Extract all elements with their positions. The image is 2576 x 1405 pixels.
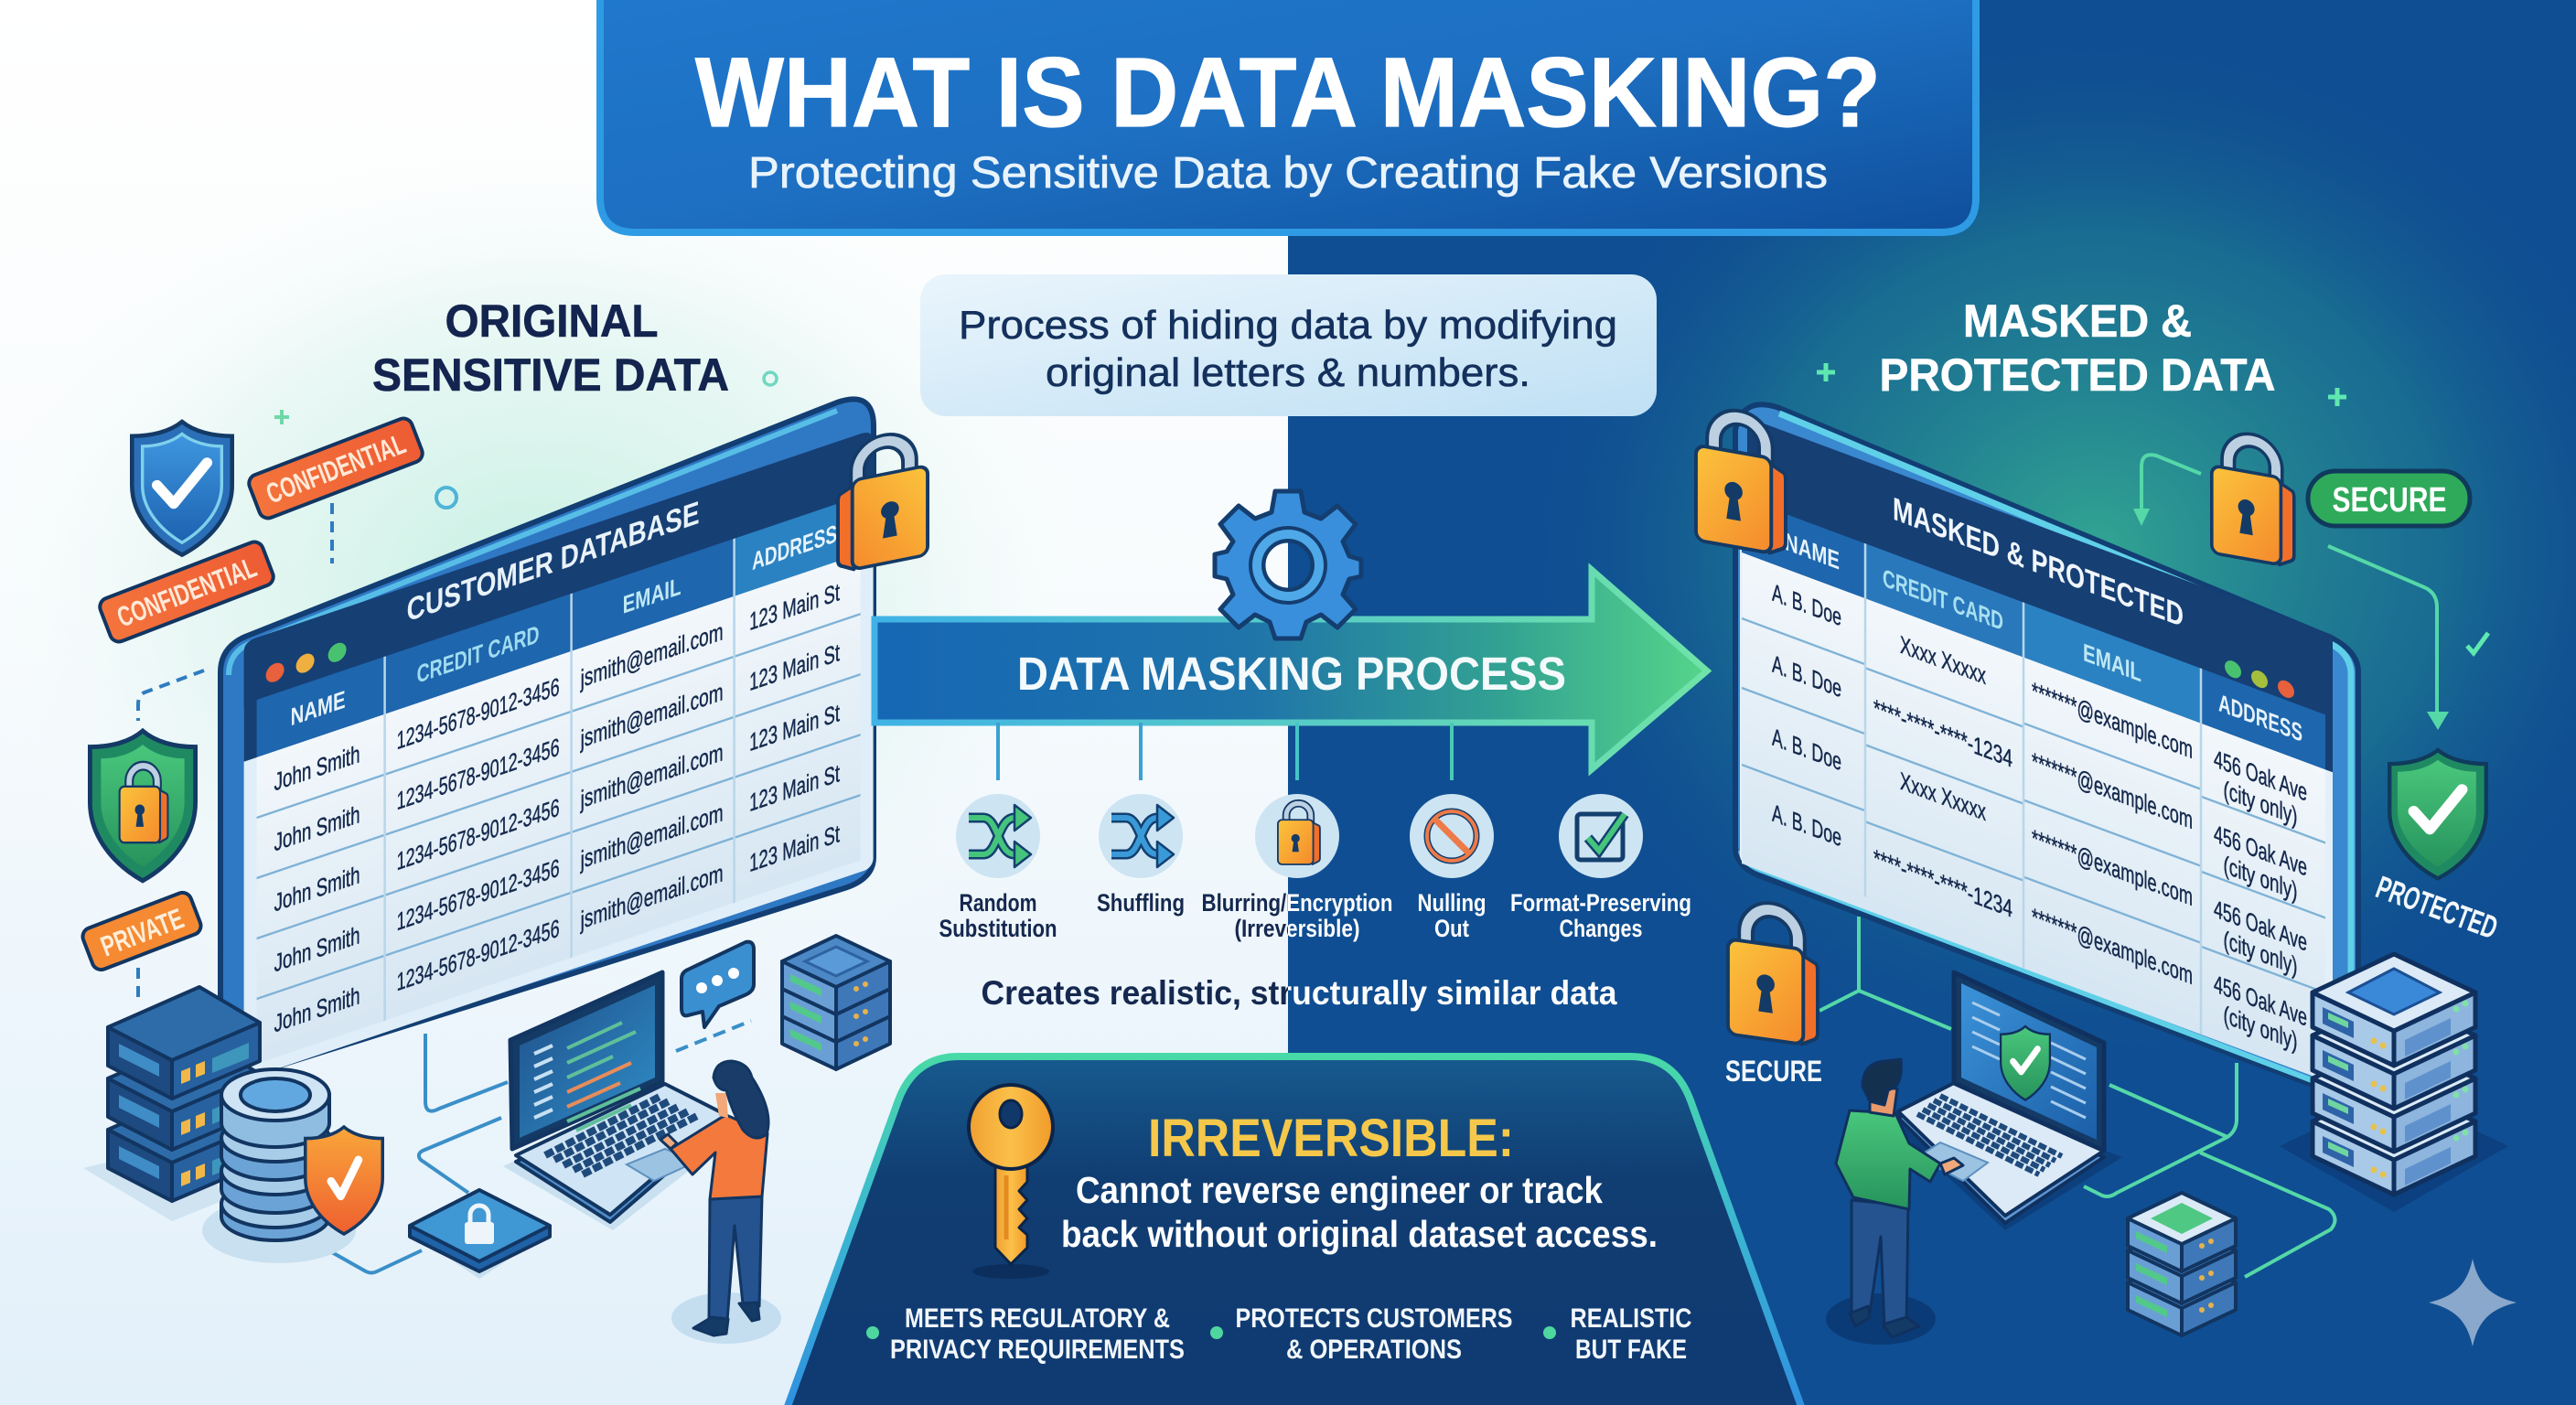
table rows: 123 Main St (749, 638, 840, 696)
background split left light (0, 0, 1288, 1405)
table rows: *******@example.com (2032, 747, 2193, 834)
step: blurring and encryption: Blurring/Encryption (1202, 889, 1392, 917)
data connectors right (1819, 455, 2449, 1277)
table rows (257, 496, 861, 1064)
panel: irreversible (785, 1056, 1804, 1405)
benefit: customers (1210, 1303, 1513, 1365)
badge: confidential lower (97, 540, 276, 644)
icon: speech bubble (676, 942, 754, 1051)
benefit: regulatory: PRIVACY REQUIREMENTS (890, 1335, 1185, 1365)
step: shuffling: Shuffling (1097, 889, 1185, 917)
heading: original sensitive data (372, 295, 729, 401)
table rows: jsmith@email.com (580, 799, 724, 874)
sparkle decorations left (274, 372, 777, 508)
table rows: ****-****-****-1234 (1873, 843, 2012, 923)
table rows: (city only) (2223, 776, 2298, 831)
table rows: 123 Main St (749, 698, 840, 756)
callout: definition (920, 274, 1657, 416)
table rows: 456 Oak Ave (2214, 970, 2307, 1032)
process stems (998, 723, 1452, 780)
callout: definition: original letters & numbers. (1046, 350, 1530, 395)
table rows: 123 Main St (749, 758, 840, 817)
benefit: realistic: REALISTIC (1570, 1303, 1692, 1334)
step: random substitution (939, 794, 1057, 942)
table rows: *******@example.com (2032, 903, 2193, 990)
icon: green shield with lock (90, 731, 196, 881)
table rows: jsmith@email.com (580, 738, 724, 814)
table rows: 1234-5678-9012-3456 (397, 733, 560, 815)
badge: confidential upper (246, 416, 425, 520)
heading: original sensitive data: ORIGINAL (445, 295, 659, 347)
icon: padlock lower with secure label (1725, 904, 1822, 1088)
icon: padlock top left of masked window (1696, 410, 1786, 556)
label: protected: PROTECTED (2371, 870, 2502, 946)
window dots (2225, 658, 2294, 701)
step: format preserving changes: Changes (1559, 915, 1643, 942)
table rows (1742, 498, 2325, 1080)
benefit: customers: PROTECTS CUSTOMERS (1235, 1303, 1513, 1334)
table rows: 456 Oak Ave (2214, 895, 2307, 957)
heading: masked and protected data (1879, 295, 2276, 401)
background mint glow (0, 128, 1125, 1043)
icon: man at laptop (1826, 1059, 1963, 1345)
table rows: (city only) (2223, 926, 2298, 981)
benefit: customers: & OPERATIONS (1286, 1335, 1462, 1365)
title banner (600, 0, 1976, 232)
icon: sparkle watermark (2429, 1259, 2517, 1346)
table rows: (city only) (2223, 1001, 2298, 1056)
panel description (1061, 1169, 1658, 1255)
table rows: Xxxx Xxxxx (1900, 767, 1986, 826)
benefit: realistic (1543, 1303, 1692, 1365)
step: blurring and encryption (1202, 794, 1392, 942)
icon: padlock lower with secure label: SECURE (1725, 1055, 1822, 1088)
table rows: *******@example.com (2032, 824, 2193, 911)
table rows: ****-****-****-1234 (1873, 693, 2012, 773)
panel: customer database window (220, 399, 874, 1080)
header row: NAME (291, 685, 346, 731)
icon: server stack (83, 987, 260, 1221)
badge: secure: SECURE (2333, 481, 2446, 520)
callout: definition: Process of hiding data by modifying (959, 303, 1617, 348)
benefit: realistic: BUT FAKE (1575, 1335, 1687, 1365)
icon: database cylinder (202, 1069, 356, 1263)
icon: laptop with code (503, 972, 741, 1230)
table rows: (city only) (2223, 851, 2298, 906)
table rows: A. B. Doe (1772, 799, 1841, 852)
table rows: John Smith (274, 921, 360, 977)
icon: small green server stack (2128, 1193, 2236, 1335)
header row: EMAIL (623, 572, 682, 619)
table rows: jsmith@email.com (580, 859, 724, 935)
arrow: data masking process (875, 570, 1707, 769)
table rows: 1234-5678-9012-3456 (397, 914, 560, 996)
table rows: John Smith (274, 800, 360, 856)
table rows: A. B. Doe (1772, 723, 1841, 776)
table title: CUSTOMER DATABASE (407, 494, 700, 628)
table rows: John Smith (274, 981, 360, 1037)
table rows: Xxxx Xxxxx (1900, 630, 1986, 690)
panel: masked and protected window (1735, 404, 2358, 1102)
header row (257, 496, 861, 757)
arrow: data masking process: DATA MASKING PROCESS (1017, 648, 1566, 700)
icon: orange shield with check (306, 1127, 382, 1234)
step: nulling out (1410, 794, 1494, 942)
heading: masked and protected data: MASKED & (1963, 295, 2192, 347)
badge: confidential lower: CONFIDENTIAL (113, 551, 261, 633)
step: random substitution: Random (959, 889, 1037, 917)
panel description: back without original dataset access. (1061, 1213, 1658, 1255)
table title: MASKED & PROTECTED (1893, 489, 2184, 634)
badge: private (80, 890, 203, 972)
badge: secure (2308, 471, 2470, 526)
icon: gear (1215, 491, 1361, 638)
badge: private: PRIVATE (96, 902, 188, 963)
step: format preserving changes (1510, 794, 1691, 942)
step: random substitution: Substitution (939, 915, 1057, 942)
window dots (266, 639, 347, 686)
header row: NAME (1785, 527, 1840, 575)
table rows: 1234-5678-9012-3456 (397, 793, 560, 875)
table rows: *******@example.com (2032, 677, 2193, 764)
dashed connectors left (138, 503, 332, 999)
table rows: 1234-5678-9012-3456 (397, 853, 560, 936)
background teal glow (1509, 18, 2576, 1079)
table rows: John Smith (274, 861, 360, 917)
header row (1742, 498, 2325, 769)
background split right navy (1288, 0, 2576, 1405)
panel description: Cannot reverse engineer or track (1076, 1169, 1603, 1211)
sparkle decorations right (1817, 363, 2488, 653)
icon: woman at laptop (660, 1061, 781, 1344)
benefit: regulatory (866, 1303, 1185, 1365)
icon: blue shield with check (132, 422, 232, 555)
table rows: 1234-5678-9012-3456 (397, 672, 560, 755)
caption: realistic data: Creates realistic, structurally similar data (981, 974, 1617, 1012)
table rows: jsmith@email.com (580, 678, 724, 754)
table rows: jsmith@email.com (580, 617, 724, 693)
table rows: A. B. Doe (1772, 578, 1841, 631)
table rows: 123 Main St (749, 577, 840, 636)
header row: ADDRESS (752, 520, 837, 575)
table rows: 123 Main St (749, 819, 840, 877)
icon: padlock top right (2212, 434, 2294, 567)
badge: confidential upper: CONFIDENTIAL (262, 427, 410, 509)
step: shuffling (1097, 794, 1185, 917)
icon: laptop with shield (1884, 972, 2122, 1230)
header row: CREDIT CARD (1883, 563, 2003, 636)
data connectors left (316, 1034, 508, 1273)
heading: masked and protected data: PROTECTED DATA (1879, 349, 2276, 401)
icon: key (969, 1085, 1053, 1279)
header row: ADDRESS (2218, 689, 2302, 747)
icon: padlock on original window (838, 433, 928, 573)
step: nulling out: Out (1434, 915, 1469, 942)
step: blurring and encryption: (Irreversible) (1235, 915, 1359, 942)
table rows: A. B. Doe (1772, 649, 1841, 702)
subtitle: Protecting Sensitive Data by Creating Fake Versions (748, 149, 1828, 198)
benefit: regulatory: MEETS REGULATORY & (905, 1303, 1170, 1334)
table rows: 456 Oak Ave (2214, 820, 2307, 882)
panel heading: IRREVERSIBLE: (1148, 1109, 1514, 1168)
header row: EMAIL (2083, 638, 2141, 687)
icon: green shield with check (2389, 750, 2486, 878)
step: nulling out: Nulling (1418, 889, 1486, 917)
main title: WHAT IS DATA MASKING? (695, 37, 1881, 147)
icon: small server stack (782, 936, 890, 1069)
table rows: John Smith (274, 740, 360, 796)
table rows: 456 Oak Ave (2214, 745, 2307, 807)
icon: lock tile (410, 1190, 550, 1279)
step: format preserving changes: Format-Preserving (1510, 889, 1691, 917)
heading: original sensitive data: SENSITIVE DATA (372, 349, 729, 401)
header row: CREDIT CARD (417, 619, 540, 689)
icon: large server stack (2280, 954, 2508, 1212)
